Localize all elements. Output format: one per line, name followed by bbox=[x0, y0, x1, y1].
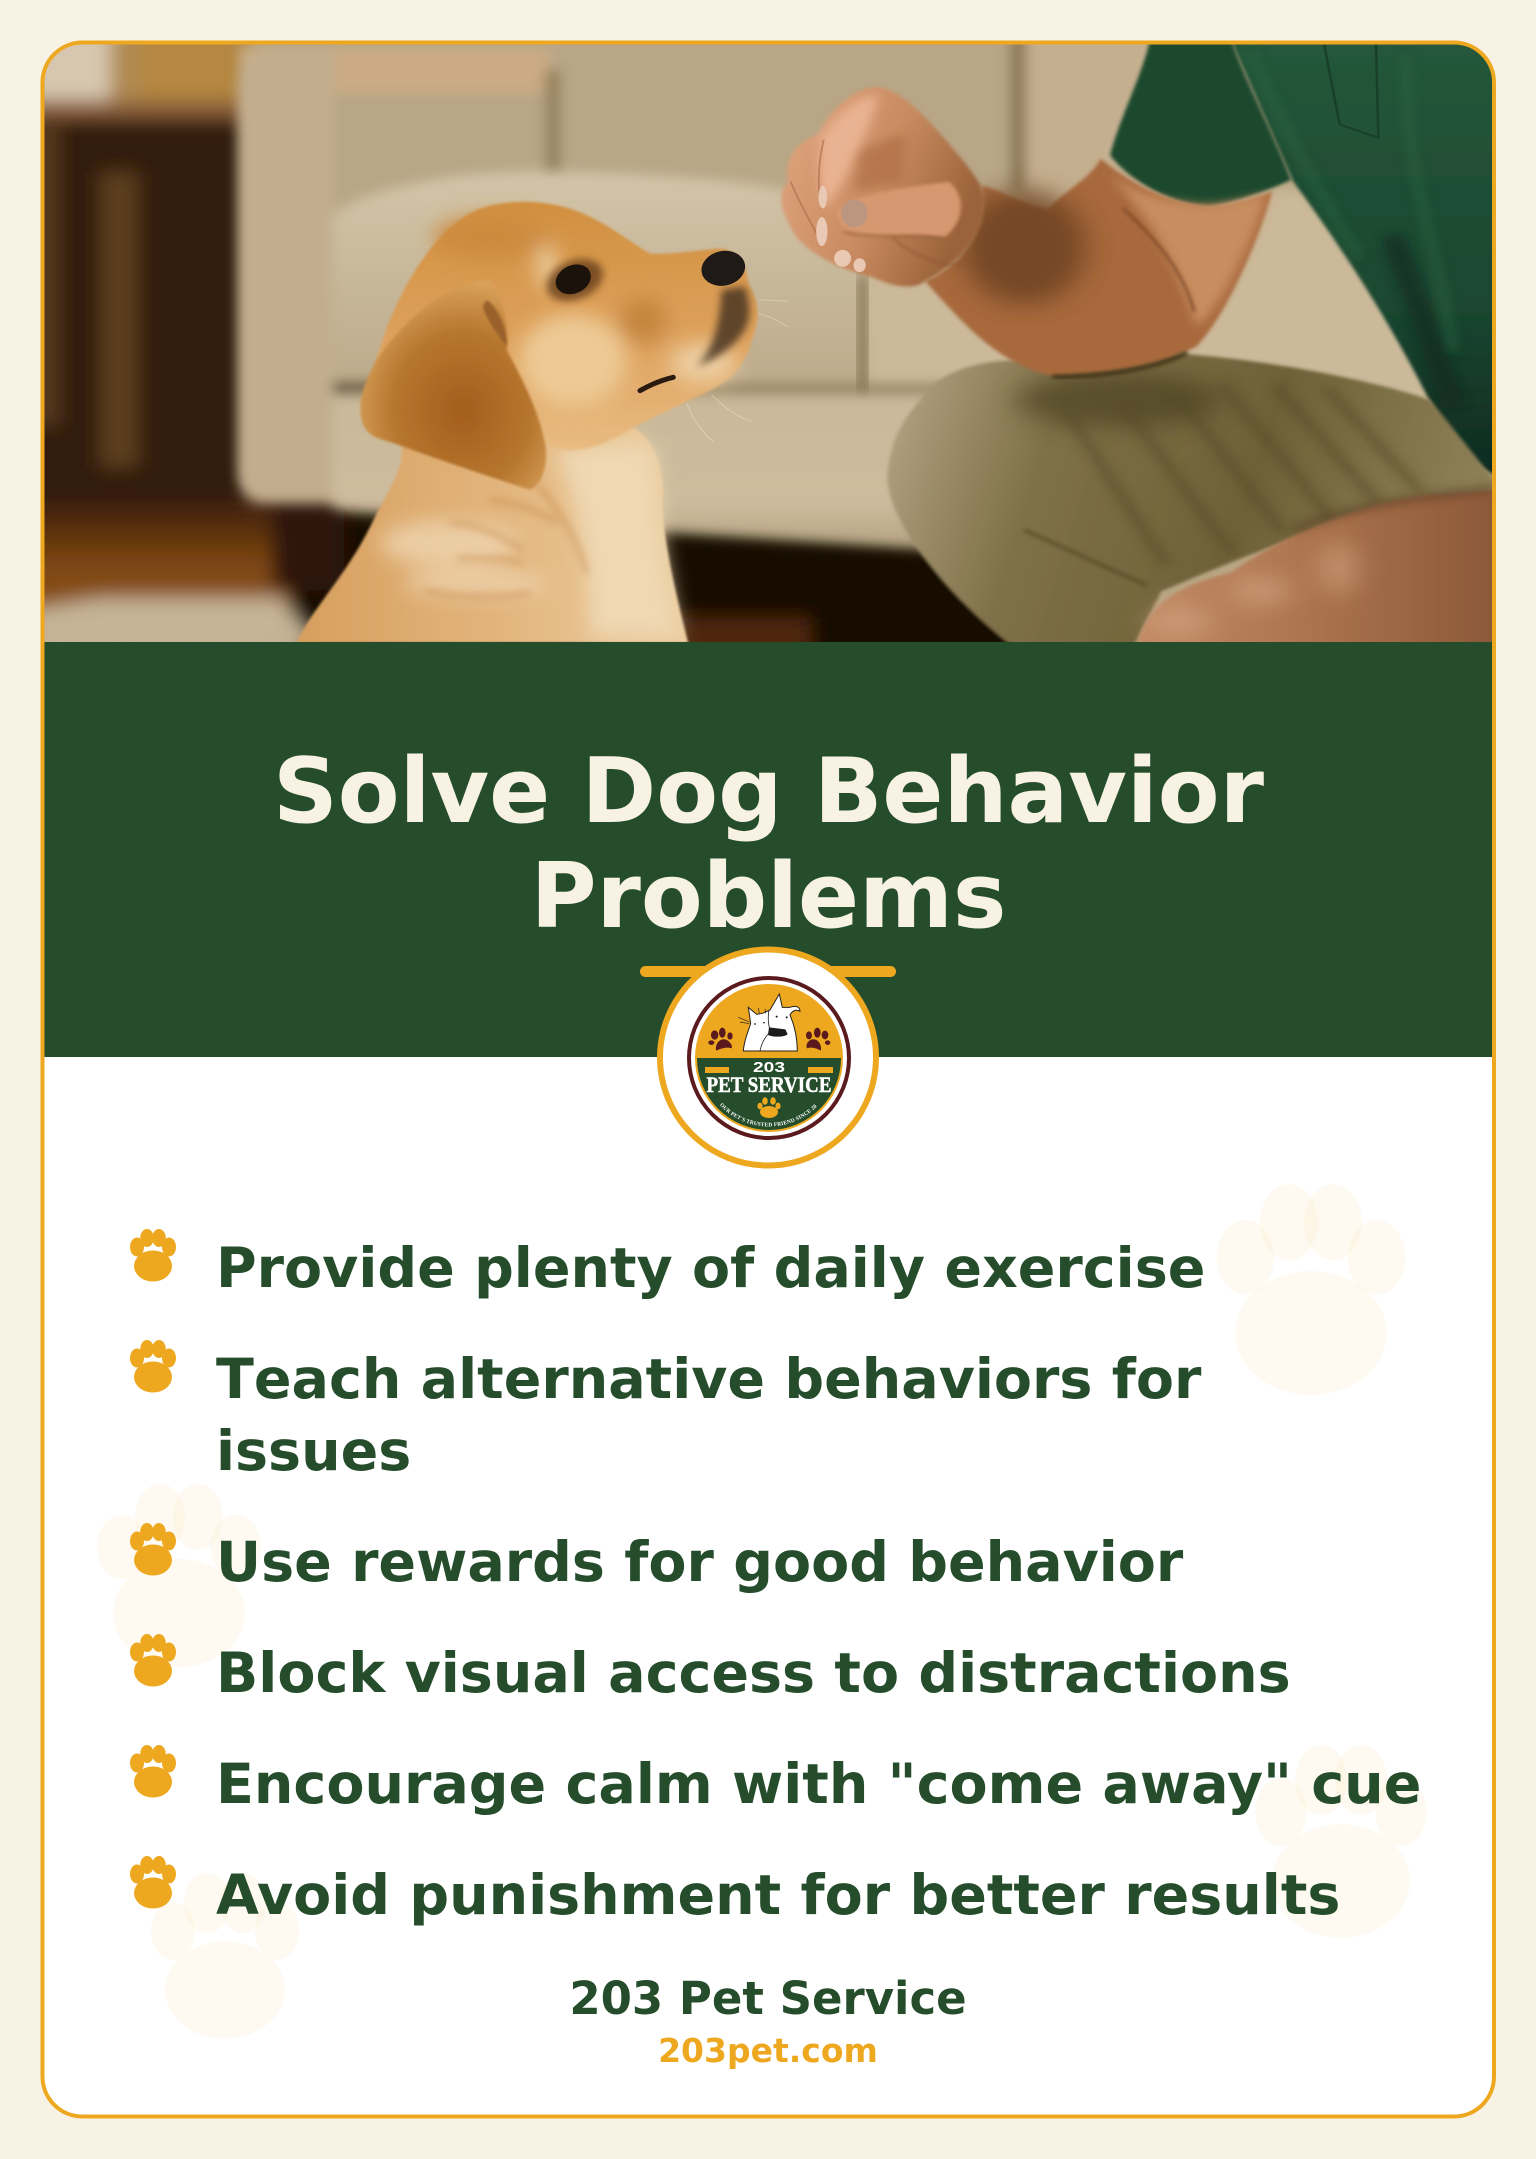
tip 4: Block visual access to distractions bbox=[216, 1641, 1291, 1706]
title band bbox=[44, 642, 1493, 1057]
tip 2: Teach alternative behaviors for bbox=[216, 1347, 1202, 1412]
trainer's right-side group, drawn in local scaled coordinates bbox=[781, 42, 1501, 649]
puppy whiskers bbox=[687, 300, 788, 442]
tip 2: issues bbox=[216, 1419, 411, 1484]
tip 5: Encourage calm with "come away" cue bbox=[216, 1752, 1421, 1817]
footer: 203 Pet Service bbox=[569, 1972, 967, 2025]
tips list bbox=[130, 1229, 1421, 1928]
puppy lip bbox=[697, 287, 749, 367]
tip 1: Provide plenty of daily exercise bbox=[216, 1236, 1205, 1301]
logo wordmark: PET SERVICE bbox=[706, 1072, 832, 1097]
logo bars bbox=[705, 1067, 833, 1073]
footer: 203pet.com bbox=[658, 2031, 878, 2070]
puppy eye bbox=[542, 254, 608, 306]
photo: puppy watching trainer's raised hand bbox=[20, 20, 1501, 660]
title: Solve Dog Behavior bbox=[273, 739, 1265, 844]
blurred room: cabinet, lamp and floor bbox=[44, 44, 1010, 642]
title underline bbox=[640, 966, 896, 977]
trainer's trousers bbox=[887, 354, 1501, 649]
trainer's sleeve bbox=[1110, 42, 1291, 207]
trainer's fingernails bbox=[816, 186, 868, 272]
watermark paw: bottom left bbox=[151, 1873, 299, 2038]
watermark paw: top right bbox=[1217, 1184, 1405, 1395]
trainer's shirt bbox=[1232, 42, 1501, 478]
trainer's thumb bbox=[836, 182, 961, 237]
tip 2 bbox=[130, 1340, 1202, 1484]
logo dog and cat bbox=[738, 994, 800, 1051]
trainer's forearm bbox=[925, 159, 1272, 375]
blurred sofa bbox=[238, 30, 1440, 549]
puppy body bbox=[297, 423, 688, 643]
footer bbox=[569, 1972, 967, 2070]
trainer's hand bbox=[781, 87, 984, 287]
puppy nose bbox=[702, 250, 746, 286]
puppy mouth bbox=[640, 377, 673, 391]
logo wordmark bbox=[706, 1059, 832, 1097]
watermark paws bbox=[97, 1184, 1426, 2038]
puppy head bbox=[368, 202, 758, 457]
logo maroon paws bbox=[708, 1028, 830, 1051]
logo tagline: YOUR PET'S TRUSTED FRIEND SINCE 2004 bbox=[720, 1103, 816, 1126]
tip 6: Avoid punishment for better results bbox=[216, 1863, 1340, 1928]
watermark paw: left bbox=[97, 1484, 261, 1667]
title: Problems bbox=[531, 844, 1006, 949]
watermark paw: right bbox=[1256, 1745, 1426, 1938]
sofa cushion seam bbox=[858, 275, 867, 390]
logo gold paw bbox=[757, 1097, 781, 1118]
tip 3: Use rewards for good behavior bbox=[216, 1530, 1184, 1595]
puppy, drawn in local scaled coordinates bbox=[297, 202, 788, 643]
title bbox=[273, 739, 1265, 949]
trainer's lower hand bbox=[1135, 490, 1501, 649]
logo badge bbox=[657, 946, 879, 1168]
puppy ear bbox=[360, 280, 546, 490]
logo wordmark: 203 bbox=[753, 1059, 785, 1076]
